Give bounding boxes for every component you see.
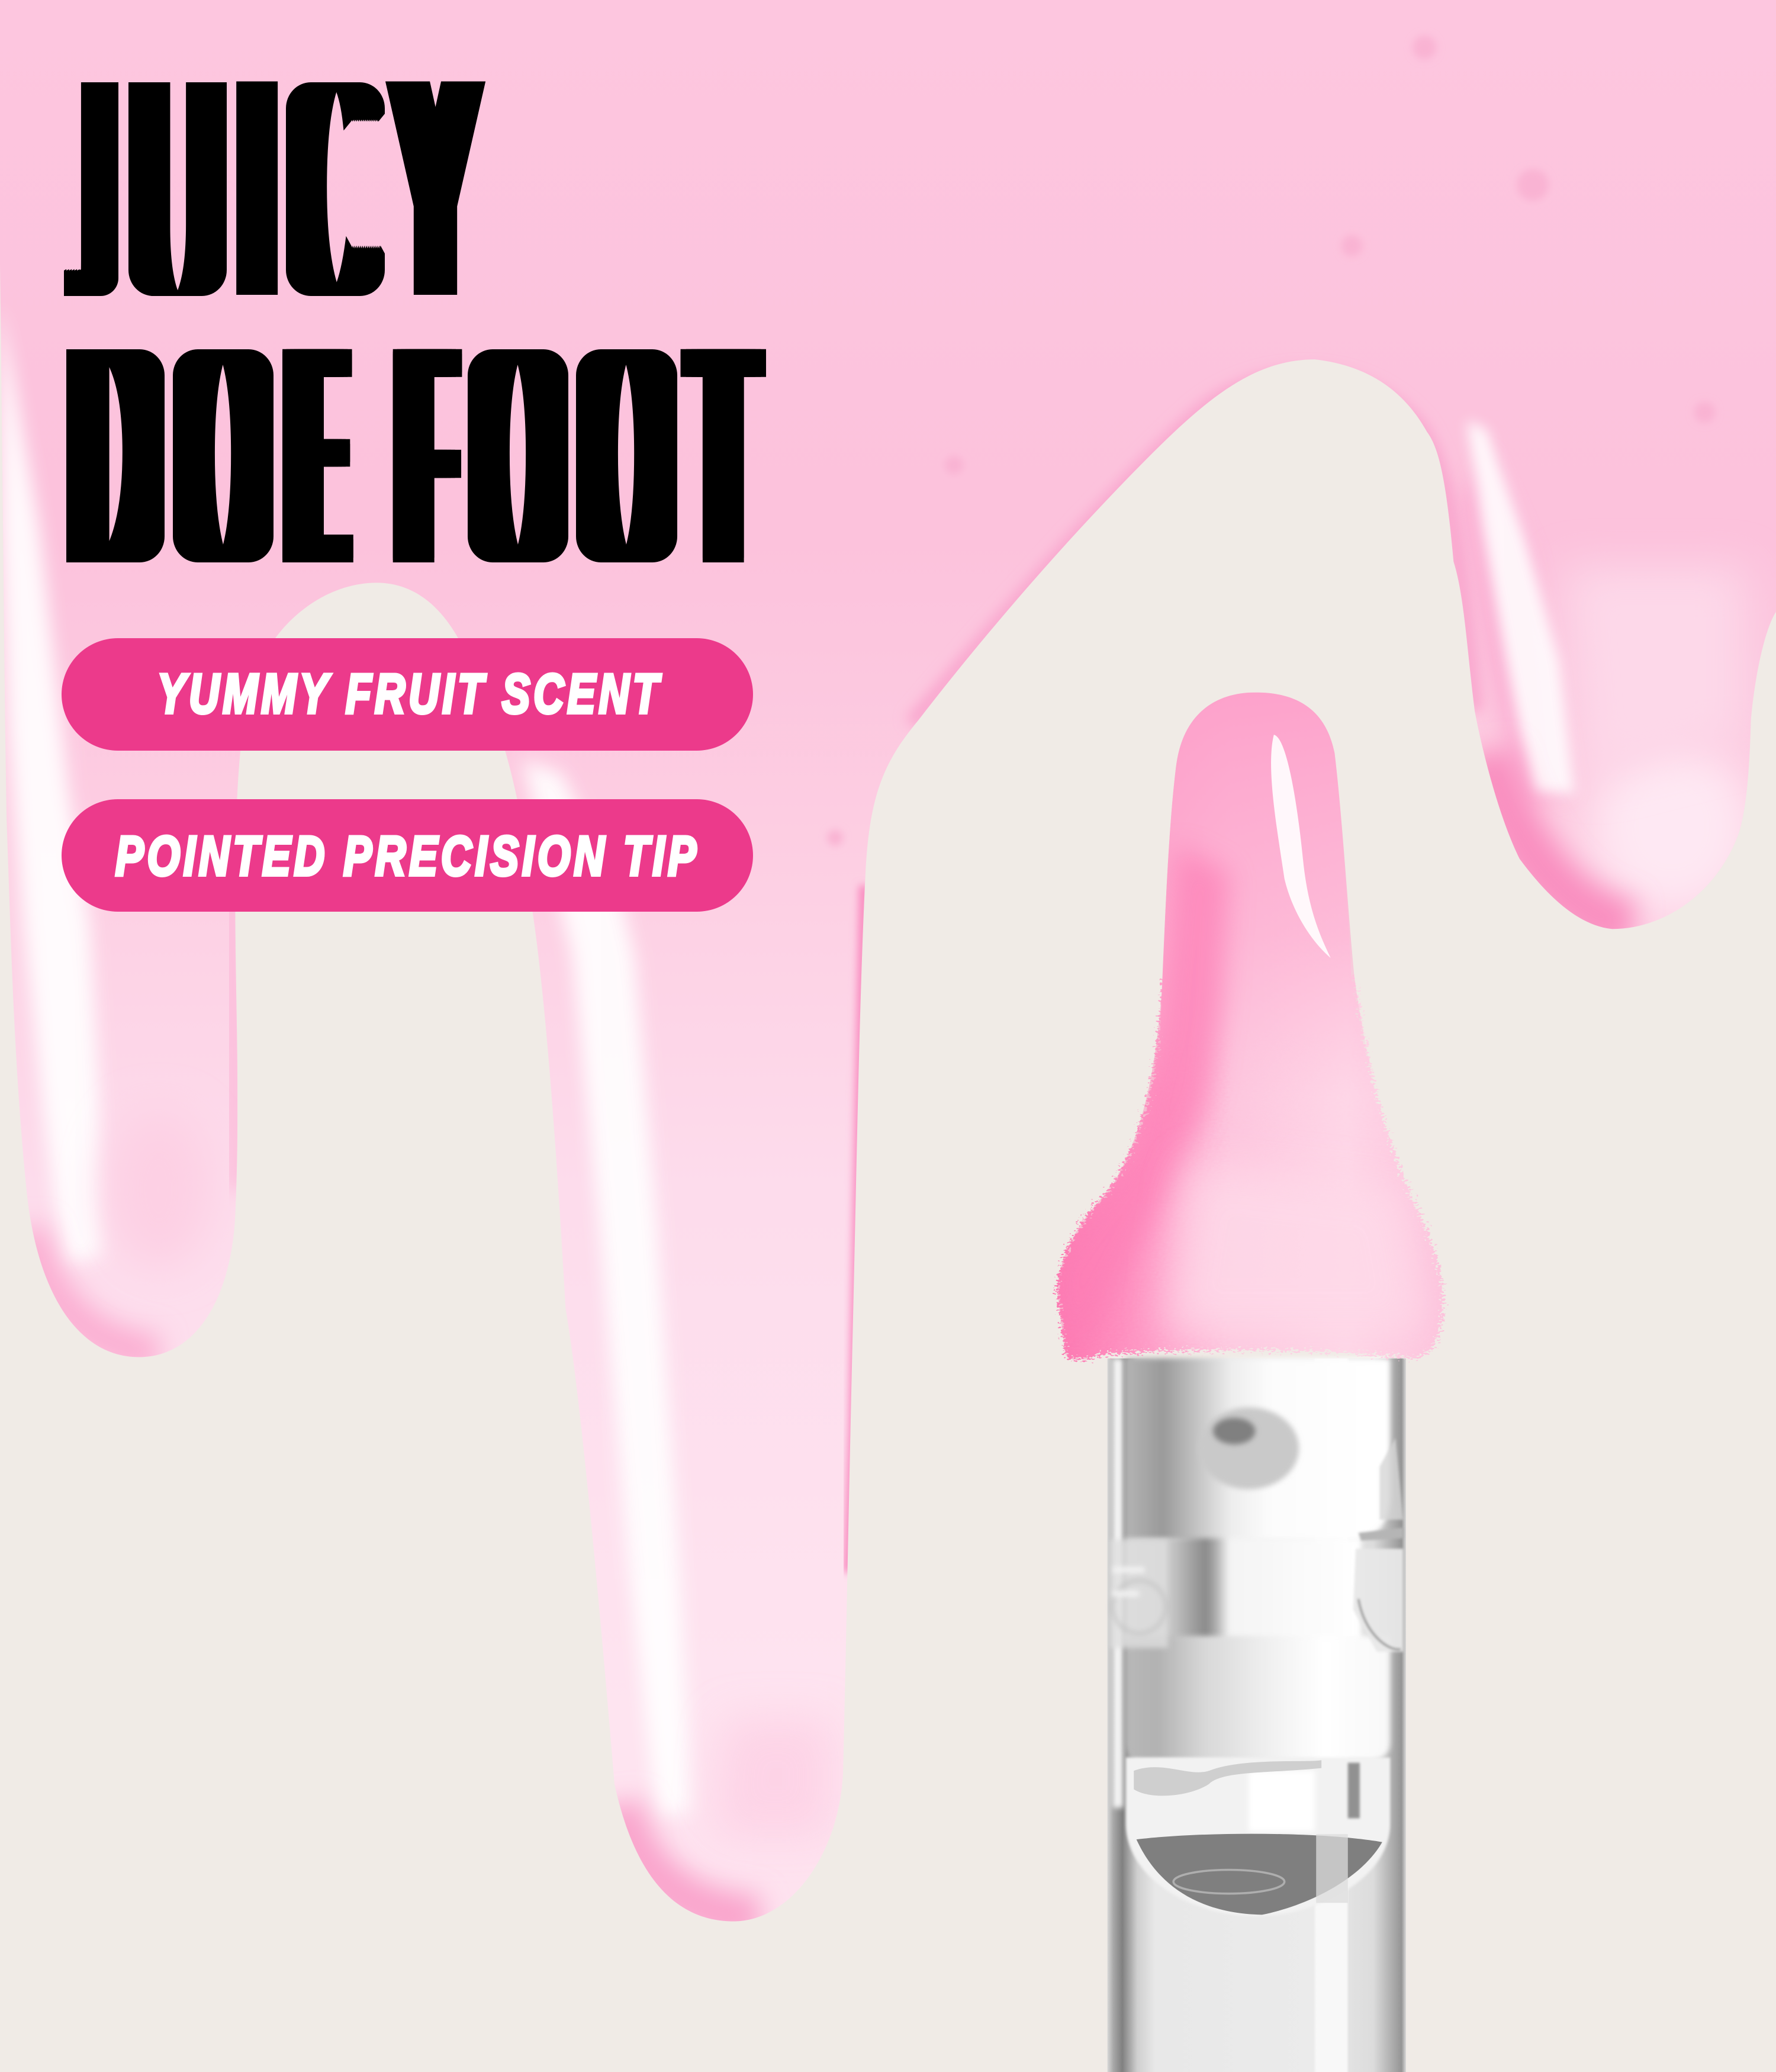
glass applicator tube — [1108, 1359, 1406, 2072]
pill: yummy fruit scent: YUMMY FRUIT SCENT — [157, 662, 662, 725]
pill: pointed precision tip — [62, 799, 753, 912]
plug lower section — [1126, 1636, 1390, 1760]
title line two — [66, 285, 766, 625]
white plug upper section — [1126, 1359, 1390, 1541]
tube body — [1108, 1359, 1406, 2072]
gloss highlight — [1271, 735, 1331, 958]
fuzzy flare — [1057, 978, 1443, 1359]
left bright edge — [1112, 1359, 1123, 1808]
title: Juicy Doe Foot — [64, 15, 766, 625]
air bubble line — [1134, 1760, 1321, 1796]
plug hole — [1199, 1407, 1299, 1489]
pill: yummy fruit scent — [62, 638, 753, 751]
pink flocked doe foot tip — [1051, 693, 1453, 1361]
tip shading — [1051, 693, 1453, 1361]
title: Juicy Doe Foot: Y — [383, 15, 455, 361]
smooth glossy top — [1160, 693, 1354, 1031]
title: Juicy Doe Foot: T — [678, 285, 736, 625]
chamber grey stripe — [1348, 1763, 1360, 1818]
liquid chamber — [1126, 1758, 1390, 1916]
title: Juicy Doe Foot: E — [277, 285, 321, 625]
chamber bright band — [1249, 1771, 1315, 1832]
pill: pointed precision tip: POINTED PRECISION TIP — [115, 825, 700, 887]
right glass detail — [1353, 1438, 1404, 1652]
liquid meniscus — [1137, 1834, 1382, 1915]
left glass detail — [1110, 1539, 1168, 1648]
plug neck — [1126, 1538, 1361, 1641]
title: Juicy Doe Foot: I — [221, 15, 265, 361]
title: Juicy Doe Foot: F — [387, 285, 430, 625]
title line one — [64, 15, 485, 541]
